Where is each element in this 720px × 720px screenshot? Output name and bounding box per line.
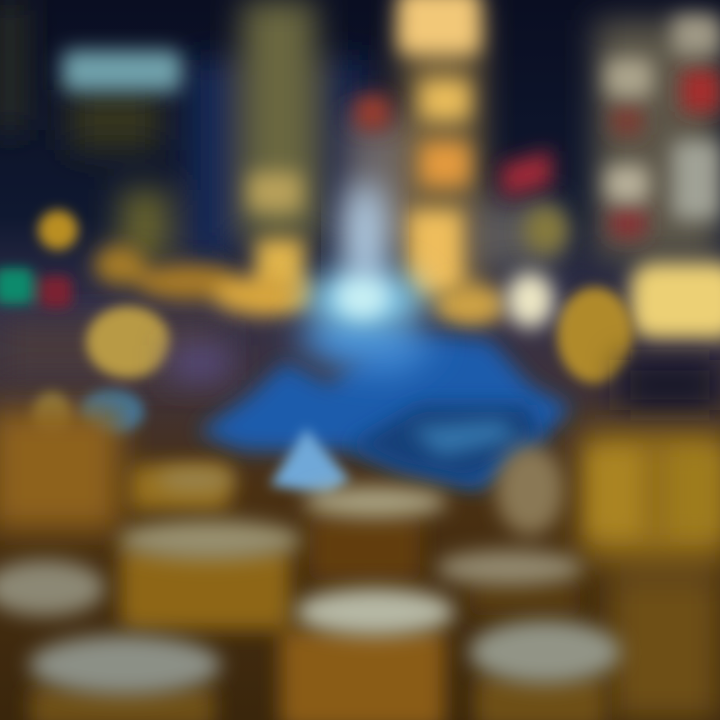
signs: red accents (355, 70, 720, 238)
sign: teal billboard (62, 50, 182, 92)
chart: blue mountain shape (198, 310, 572, 495)
buildings: dark and olive towers (0, 0, 720, 380)
coins: golden stacks (0, 410, 720, 720)
floor band: dim purple horizon (170, 345, 720, 410)
light band: orange street glow (94, 245, 506, 327)
glow: central white-blue burst (305, 180, 425, 332)
coin tops: pale discs (0, 445, 621, 695)
right building windows (524, 15, 720, 254)
lantern: bright right lamp (506, 262, 720, 383)
tower lights: central golden tower (248, 0, 480, 298)
lights: left bokeh (0, 210, 170, 440)
